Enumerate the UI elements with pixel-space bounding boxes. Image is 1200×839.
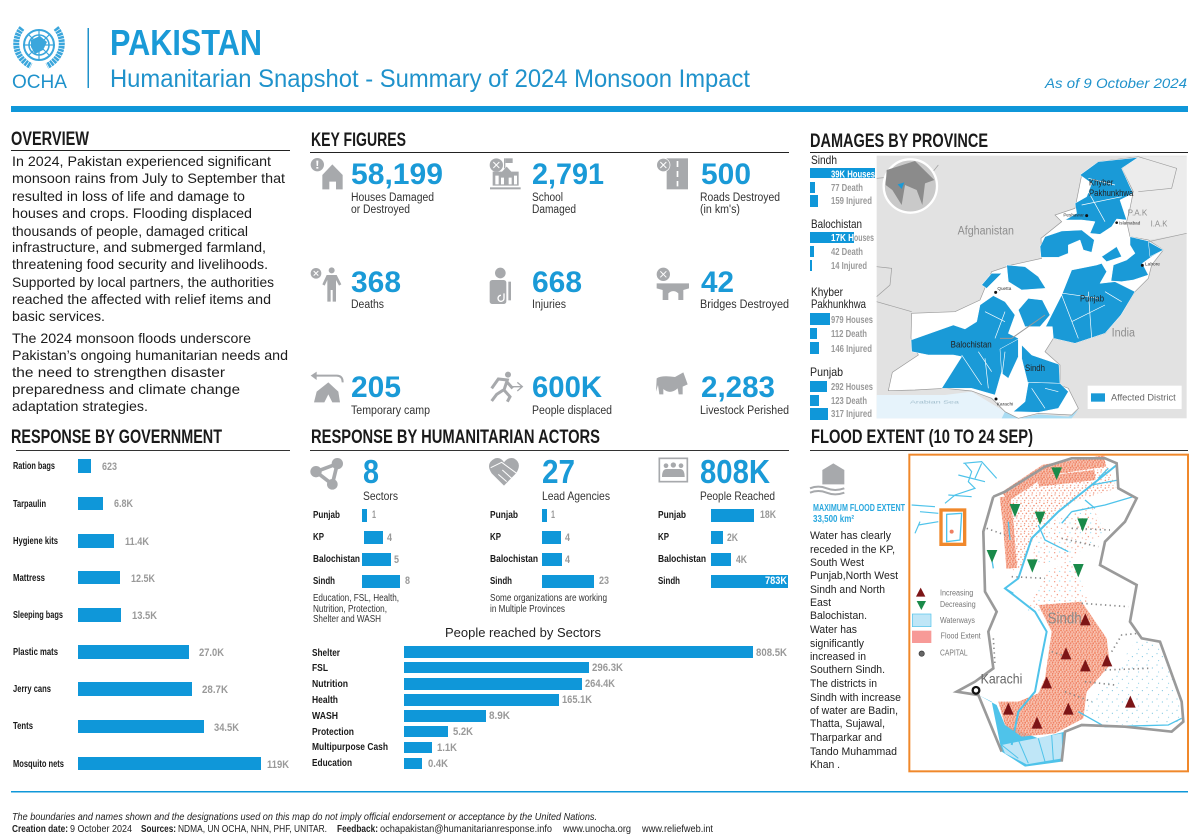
figure: injuries: Injuries — [532, 299, 566, 311]
province bars: Balochistan — [810, 217, 874, 272]
bar chart: government items: Ration bags — [13, 461, 55, 472]
figure: people reached: People Reached — [700, 489, 775, 503]
flood description text: Thatta, Sujawal, — [810, 718, 885, 730]
footer — [11, 791, 1188, 835]
river network — [1005, 465, 1117, 745]
heading: response by humanitarian actors: RESPONSE BY HUMANITARIAN ACTORS — [311, 427, 600, 448]
bar chart: government items: 34.5K — [214, 722, 239, 734]
bar chart: people reached by sectors: WASH — [312, 711, 338, 722]
province bars: Punjab: Punjab — [810, 365, 843, 379]
province bars: Sindh: 39K Houses — [831, 168, 875, 180]
province bars: Sindh: 77 Death — [831, 182, 863, 194]
bar chart: people reached by sectors: Nutrition — [312, 679, 348, 690]
province bars: Khyber Pakhunkhwa: Pakhunkhwa — [811, 297, 866, 311]
humanitarian icons — [310, 458, 687, 490]
flood description text: of water are Badin, — [810, 705, 898, 717]
overview text — [12, 153, 288, 414]
figure: schools: 2,791 — [532, 158, 604, 191]
figure: roads: 500 — [701, 158, 751, 191]
overview text: In 2024, Pakistan experienced significant — [12, 153, 271, 169]
heading: key figures: KEY FIGURES — [311, 130, 406, 151]
province bars: Balochistan: 17K H — [831, 232, 854, 244]
bar chart: government items: 119K — [267, 759, 289, 771]
OCHA logo: OCHA — [12, 72, 67, 93]
icon: livestock — [656, 372, 688, 394]
figure: camps: 205 — [351, 371, 401, 404]
map legend: Affected District — [1111, 392, 1176, 402]
figure: lead agencies: Lead Agencies — [542, 489, 610, 503]
bar chart: people reached by province: Punjab — [658, 510, 686, 521]
flood description text: Southern Sindh. — [810, 664, 885, 676]
maximum flood extent — [813, 503, 905, 525]
figure: houses — [351, 158, 443, 216]
credits: www.reliefweb.int — [641, 824, 713, 835]
bar chart: people reached by sectors: 5.2K — [453, 726, 473, 738]
province bars: Punjab: 317 Injured — [831, 408, 872, 420]
credits — [12, 824, 713, 835]
icon: deaths — [311, 267, 341, 302]
flood description text: Sindh and North — [810, 584, 885, 596]
panel: response by humanitarian actors — [310, 427, 789, 770]
panel: response by government — [11, 427, 290, 771]
figure: injuries: 668 — [532, 266, 582, 299]
inset globe — [884, 159, 937, 213]
figure: sectors: Sectors — [363, 489, 398, 503]
overview text: Supported by local partners, the authorities — [12, 274, 274, 290]
flood description text: receded in the KP, — [810, 544, 895, 556]
bar chart: people reached by sectors: Protection — [312, 727, 354, 738]
figure: bridges: Bridges Destroyed — [700, 299, 789, 311]
note: agencies: Some organizations are working — [490, 593, 607, 604]
credits: NDMA, UN OCHA, NHN, PHF, UNITAR. — [178, 824, 327, 835]
flood description text: increased in — [810, 651, 866, 663]
city markers — [994, 213, 1160, 406]
icon: handshake heart — [489, 458, 519, 486]
province map — [877, 156, 1187, 418]
bar chart: agencies by province — [490, 509, 609, 588]
overview text: infrastructure, and submerged farmland, — [12, 239, 266, 255]
country labels — [910, 208, 1168, 404]
flood description text: South West — [810, 557, 864, 569]
province bars: Sindh — [810, 153, 875, 207]
province bars: Balochistan: 14 Injured — [831, 260, 867, 272]
note: sectors list: Nutrition, Protection, — [313, 604, 387, 615]
credits: Sources: — [141, 824, 176, 835]
bar chart: government items: Tarpaulin — [13, 499, 46, 510]
note: sectors list: Education, FSL, Health, — [313, 593, 399, 604]
province labels — [951, 178, 1134, 373]
city markers: Quetta — [997, 286, 1012, 291]
overview text: The 2024 monsoon floods underscore — [12, 330, 251, 346]
figure: displaced — [532, 371, 612, 417]
credits: Creation date: — [12, 824, 68, 835]
bar chart: people reached by sectors: 808.5K — [756, 647, 787, 659]
bar chart: people reached by province: 783K — [765, 575, 787, 587]
flood description text: Tando Muhammad — [810, 746, 897, 758]
bar chart: government items: Sleeping bags — [13, 610, 63, 621]
bar chart: government items — [13, 459, 289, 771]
overview text: monsoon rains from July to September that — [12, 170, 285, 186]
overview text: houses and crops. Flooding displaced — [12, 205, 252, 221]
country labels: Arabian Sea — [910, 399, 960, 404]
overview text: the need to strengthen disaster — [12, 364, 225, 380]
bar chart: agencies by province: Sindh — [490, 576, 512, 587]
city markers: Peshawar — [1063, 213, 1084, 218]
figure: displaced: People displaced — [532, 405, 612, 417]
bar chart: sectors by province: 4 — [387, 532, 393, 544]
province bars: Khyber Pakhunkhwa: 112 Death — [831, 328, 867, 340]
figure: houses: or Destroyed — [351, 204, 410, 216]
figure: livestock: Livestock Perished — [700, 405, 789, 417]
disclaimer: The boundaries and names shown and the designations used on this map do not imply official endorsement or acceptance by the United Nations. — [12, 812, 597, 823]
overview text: Pakistan’s ongoing humanitarian needs and — [12, 347, 288, 363]
overview text: threatening food security and livelihoods. — [12, 256, 268, 272]
place labels: Karachi — [981, 670, 1022, 686]
bar chart: people reached by sectors: 165.1K — [562, 694, 592, 706]
place labels: Sindh — [1048, 610, 1082, 627]
overview text: adaptation strategies. — [12, 398, 148, 414]
inset Pakistan locator — [912, 462, 998, 544]
bar chart: people reached by province: Sindh — [658, 576, 680, 587]
bar chart: government items: 11.4K — [125, 536, 149, 548]
icon: flooded house — [810, 463, 844, 494]
heading: flood extent: FLOOD EXTENT (10 TO 24 SEP) — [811, 427, 1033, 448]
bar chart: sectors by province: KP — [313, 532, 324, 543]
country labels: India — [1112, 326, 1135, 340]
flood description text: significantly — [810, 638, 864, 650]
heading: people reached by sectors: People reached by Sectors — [445, 625, 601, 640]
panel: flood extent — [810, 427, 1188, 771]
icon: injuries — [490, 268, 511, 304]
province bars: Punjab — [810, 365, 873, 420]
sea and coast — [978, 695, 1065, 767]
country labels: P.A.K — [1128, 208, 1148, 218]
bar chart: people reached by sectors: 1.1K — [437, 742, 457, 754]
bar chart: people reached by sectors: 8.9K — [489, 710, 510, 722]
province labels: Sindh — [1025, 363, 1045, 373]
figure: livestock — [700, 371, 789, 417]
figure: deaths: 368 — [351, 266, 401, 299]
bar chart: sectors by province: 5 — [394, 554, 399, 566]
figure: lead agencies: 27 — [542, 453, 575, 490]
country labels: I.A.K — [1151, 219, 1168, 229]
city markers: Lahore — [1145, 262, 1160, 267]
bar chart: government items: 28.7K — [202, 684, 228, 696]
country labels: Afghanistan — [958, 223, 1014, 237]
Pakistan outline — [888, 157, 1163, 418]
flood description text: Sindh with increase — [810, 692, 901, 704]
heading: response by government: RESPONSE BY GOVERNMENT — [11, 427, 222, 448]
province labels: Punjab — [1080, 294, 1104, 304]
figure: houses: Houses Damaged — [351, 192, 434, 204]
note: agencies — [490, 593, 607, 615]
flood map legend: Flood Extent — [941, 631, 981, 640]
bar chart: government items: 623 — [102, 461, 117, 473]
flood description text: Punjab,North West — [810, 570, 898, 582]
increasing markers — [1003, 613, 1136, 729]
panel: key figures — [310, 130, 789, 417]
note: agencies: in Multiple Provinces — [490, 604, 565, 615]
bar chart: people reached by sectors: FSL — [312, 663, 328, 674]
bar chart: people reached by province: KP — [658, 532, 669, 543]
maximum flood extent: 33,500 km² — [813, 513, 854, 525]
bar chart: people reached by sectors — [312, 646, 787, 770]
flood description text: Water has clearly — [810, 530, 891, 542]
city markers: Islamabad — [1119, 220, 1141, 225]
figure: displaced: 600K — [532, 371, 602, 404]
city markers: Karachi — [997, 401, 1013, 406]
icon: bridge destroyed — [657, 268, 689, 300]
bar chart: people reached by sectors: Health — [312, 695, 338, 706]
affected districts — [911, 157, 1163, 412]
flood description text: Tharparkar and — [810, 732, 882, 744]
icon: house damaged — [311, 158, 343, 189]
bar chart: sectors by province: Balochistan — [313, 554, 360, 565]
place labels — [973, 610, 1082, 694]
flood description text: Khan . — [810, 759, 840, 771]
province bars: Khyber Pakhunkhwa: 979 Houses — [831, 314, 873, 326]
flood extent areas — [998, 461, 1182, 737]
province bars: Khyber Pakhunkhwa: Khyber — [811, 285, 843, 299]
bar chart: agencies by province: 1 — [551, 509, 555, 521]
flood description text: Water has — [810, 624, 857, 636]
figure: schools: School — [532, 192, 563, 204]
bar chart: agencies by province: 23 — [599, 575, 609, 587]
flood description text: Balochistan. — [810, 610, 867, 622]
credits: Feedback: — [337, 824, 378, 835]
overview text: basic services. — [12, 308, 105, 324]
bar chart: government items: Mosquito nets — [13, 759, 64, 770]
heading: damages by province: DAMAGES BY PROVINCE — [810, 131, 988, 152]
icon: people reached — [659, 458, 687, 482]
province labels: Khyber — [1089, 178, 1113, 188]
icon: sectors network — [310, 458, 343, 490]
bar chart: sectors by province: Sindh — [313, 576, 335, 587]
bar chart: people reached by sectors: 296.3K — [592, 662, 623, 674]
credits: www.unocha.org — [562, 824, 631, 835]
bar chart: people reached by province: 2K — [727, 532, 738, 544]
figure: livestock: 2,283 — [701, 371, 775, 404]
figure: roads: (in km's) — [700, 204, 740, 216]
flood map legend: Waterways — [940, 616, 975, 625]
bar chart: sectors by province — [313, 509, 410, 588]
bar chart: government items: Hygiene kits — [13, 536, 58, 547]
figure: bridges — [700, 266, 789, 311]
flood description text: The districts in — [810, 678, 877, 690]
bar chart: government items: 27.0K — [199, 647, 224, 659]
rivers and white district lines — [962, 178, 1122, 408]
bar chart: agencies by province: Balochistan — [490, 554, 538, 565]
bar chart: people reached by province: 18K — [760, 509, 776, 521]
province bars: Sindh: Sindh — [811, 153, 837, 167]
map legend — [1088, 386, 1182, 409]
icon: people displaced — [492, 372, 522, 402]
bar chart: people reached by sectors: 264.4K — [585, 678, 615, 690]
figure: houses: 58,199 — [351, 158, 443, 191]
bar chart: agencies by province: Punjab — [490, 510, 518, 521]
province bars: Punjab: 123 Death — [831, 395, 867, 407]
province bars: Balochistan: 42 Death — [831, 246, 863, 258]
bar chart: government items: Mattress — [13, 573, 45, 584]
credits: ochapakistan@humanitarianresponse.info — [380, 824, 552, 835]
icon: road destroyed — [657, 158, 688, 189]
overview text: thousands of people, damaged critical — [12, 223, 248, 239]
bar chart: agencies by province: KP — [490, 532, 501, 543]
bar chart: agencies by province: 4 — [565, 554, 571, 566]
figure: camps: Temporary camp — [351, 405, 430, 417]
figure: lead agencies — [542, 453, 610, 503]
header — [12, 22, 1187, 93]
key figure icons — [311, 158, 689, 402]
Sindh boundary — [957, 458, 1183, 762]
overview text: preparedness and climate change — [12, 381, 240, 397]
flood map legend: Decreasing — [940, 600, 976, 609]
icon: school damaged — [490, 158, 521, 189]
note: sectors list — [313, 593, 399, 625]
flood map legend — [912, 588, 981, 658]
province labels: Balochistan — [951, 340, 992, 350]
bar chart: government items: Tents — [13, 721, 33, 732]
province bars: Sindh: 159 Injured — [831, 195, 872, 207]
bar chart: people reached by sectors: 0.4K — [428, 758, 448, 770]
figure: roads — [700, 158, 780, 216]
bar chart: people reached by sectors: Shelter — [312, 648, 340, 659]
title: PAKISTAN — [110, 22, 262, 63]
heading: overview: OVERVIEW — [11, 129, 89, 150]
province bars: Khyber Pakhunkhwa: 146 Injured — [831, 343, 872, 355]
figure: schools: Damaged — [532, 204, 576, 216]
icon: temporary camp — [311, 372, 343, 402]
flood map — [909, 455, 1188, 771]
maximum flood extent: MAXIMUM FLOOD EXTENT — [813, 503, 905, 514]
bar chart: people reached by sectors: Multipurpose Cash — [312, 742, 388, 753]
bar chart: agencies by province: 4 — [565, 532, 571, 544]
overview text: reached the affected with relief items and — [12, 291, 271, 307]
district boundaries — [987, 528, 1148, 702]
figure: schools — [532, 158, 604, 216]
figure: sectors: 8 — [363, 453, 379, 490]
overview text: resulted in loss of life and damage to — [12, 188, 245, 204]
panel: damages by province — [810, 131, 1188, 420]
bar chart: people reached by province — [658, 509, 788, 588]
figure: camps — [351, 371, 430, 417]
figure: bridges: 42 — [701, 266, 734, 299]
flood description text — [810, 530, 901, 771]
flood description text: East — [810, 597, 831, 609]
province bars: Balochistan: Balochistan — [811, 217, 862, 231]
bar chart: sectors by province: Punjab — [313, 510, 340, 521]
note: sectors list: Shelter and WASH — [313, 614, 381, 625]
province bars: Punjab: 292 Houses — [831, 381, 873, 393]
date: As of 9 October 2024 — [1044, 75, 1187, 91]
province labels: Pakhunkhwa — [1089, 188, 1134, 198]
OCHA logo — [12, 28, 67, 93]
figure: roads: Roads Destroyed — [700, 192, 780, 204]
bar chart: government items: 13.5K — [132, 610, 157, 622]
bar chart: government items: Jerry cans — [13, 684, 51, 695]
panel: overview — [11, 129, 290, 414]
flood map legend: Increasing — [940, 588, 973, 597]
province bars: Balochistan: ouses — [854, 232, 874, 244]
decreasing markers — [987, 467, 1088, 577]
figure: deaths: Deaths — [351, 299, 384, 311]
bar chart: people reached by sectors: Education — [312, 758, 352, 769]
bar chart: government items: 12.5K — [131, 573, 155, 585]
bar chart: people reached by province: Balochistan — [658, 554, 706, 565]
bar chart: government items: 6.8K — [114, 498, 133, 510]
bar chart: people reached by province: 4K — [736, 554, 747, 566]
bar chart: sectors by province: 8 — [405, 575, 410, 587]
figure: people reached: 808K — [700, 453, 770, 490]
subtitle: Humanitarian Snapshot - Summary of 2024 Monsoon Impact — [110, 65, 750, 93]
bar chart: government items: Plastic mats — [13, 647, 58, 658]
credits: 9 October 2024 — [70, 824, 132, 835]
figure: sectors — [363, 453, 398, 503]
province bars: Khyber Pakhunkhwa — [810, 285, 873, 355]
flood map legend: CAPITAL — [940, 649, 968, 658]
bar chart: sectors by province: 1 — [372, 509, 376, 521]
